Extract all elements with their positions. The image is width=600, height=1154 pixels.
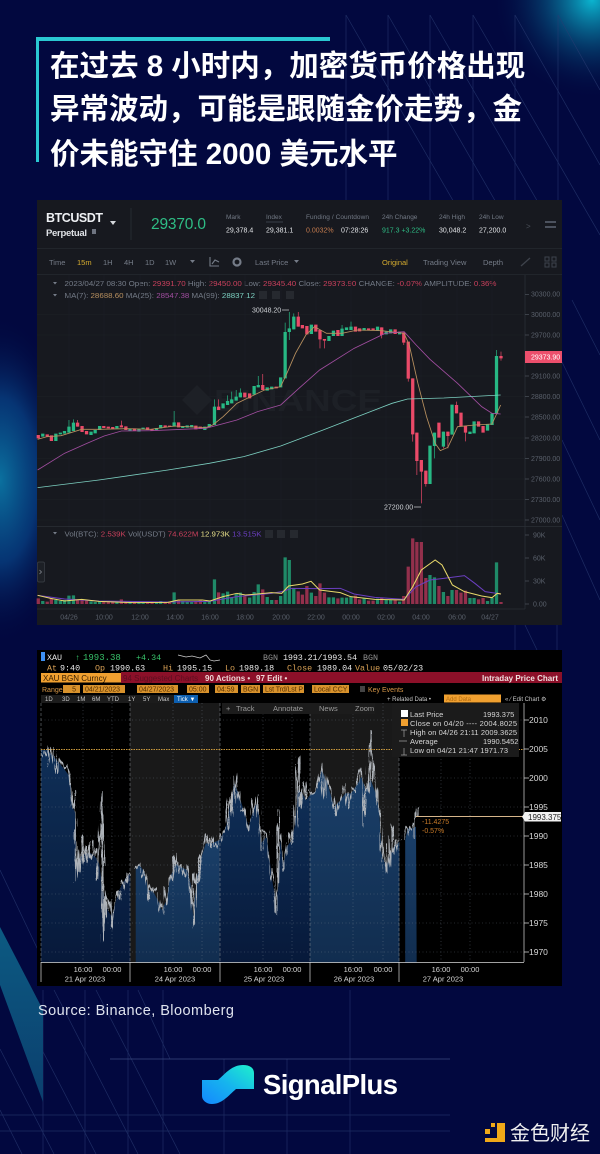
current price tag bbox=[525, 351, 562, 363]
header: symbol and market stats: 24h Low bbox=[479, 214, 504, 221]
title accent bracket bbox=[36, 37, 330, 162]
time axis: 25 Apr 2023 bbox=[244, 974, 284, 984]
header: symbol and market stats: > bbox=[526, 222, 531, 231]
panel: Binance BTCUSDT chart bbox=[37, 200, 562, 625]
title text: 价未能守住 2000 美元水平 bbox=[50, 138, 398, 171]
price axis: 27900.00 bbox=[531, 456, 560, 463]
time axis: 27 Apr 2023 bbox=[423, 974, 463, 984]
chart toolbar: 1H bbox=[103, 258, 113, 267]
quote rows: At bbox=[47, 664, 57, 674]
period tabs: « ⁄ Edit Chart ⚙ bbox=[505, 696, 546, 703]
header: symbol and market stats: Mark bbox=[226, 214, 241, 221]
high / low price markers: 30048.20 bbox=[252, 308, 281, 314]
price axis: 28200.00 bbox=[531, 436, 560, 442]
range row: 04:59 bbox=[217, 686, 235, 694]
price axis: 1990 bbox=[529, 831, 548, 841]
price axis: 27000.00 bbox=[531, 518, 560, 524]
header: symbol and market stats: 27,200.0 bbox=[479, 228, 506, 234]
command bar: XAU BGN Curncy bbox=[43, 674, 107, 683]
header: symbol and market stats: 917.3 +3.22% bbox=[382, 228, 425, 234]
price axis: 27600.00 bbox=[531, 476, 560, 484]
header: symbol and market stats: 29,381.1 bbox=[266, 228, 293, 234]
volume readout: Vol(BTC): 2.539K Vol(USDT) 74.622M 12.973K 13.515K bbox=[64, 532, 262, 538]
period tabs bbox=[41, 694, 546, 703]
time axis: 04:00 bbox=[412, 614, 430, 622]
range row: Range bbox=[42, 687, 63, 694]
time axis: 22:00 bbox=[307, 614, 325, 622]
price axis: 1993.375 bbox=[528, 813, 562, 822]
volume readout bbox=[53, 530, 298, 538]
period tabs: Max bbox=[158, 697, 169, 703]
quote rows: 1995.15 bbox=[177, 664, 212, 674]
legend: Last Price bbox=[410, 710, 443, 719]
legend: Low on 04/21 21:47 1971.73 bbox=[410, 746, 508, 755]
legend: 1990.5452 bbox=[483, 737, 518, 746]
quote rows: BGN bbox=[363, 653, 378, 663]
command bar: 90 Actions • bbox=[205, 674, 250, 683]
time axis: 06:00 bbox=[448, 614, 466, 622]
last price line and change: -0.57% bbox=[422, 828, 444, 835]
header: symbol and market stats bbox=[46, 208, 556, 240]
watermark: BINANCE bbox=[214, 383, 382, 418]
price axis bbox=[41, 703, 562, 962]
close on 04/20 reference line bbox=[41, 748, 524, 750]
period tabs: 6M bbox=[92, 697, 100, 703]
plot grid bbox=[41, 703, 524, 962]
time axis: 16:00 bbox=[201, 614, 219, 622]
range row: 04/21/2023 bbox=[85, 686, 120, 694]
period tabs: YTD bbox=[107, 697, 120, 703]
chart toolbar: Original bbox=[382, 258, 408, 267]
price axis: 30000.00 bbox=[531, 312, 560, 319]
candlestick chart with moving averages bbox=[38, 312, 501, 503]
chart toolbar: Zoom bbox=[355, 704, 374, 713]
logo: SignalPlus bbox=[202, 1065, 398, 1104]
price axis: 1995 bbox=[529, 802, 548, 812]
legend: High on 04/26 21:11 2009.3625 bbox=[410, 728, 517, 737]
icon: Jinse mark bbox=[485, 1123, 505, 1142]
period tabs: 1D bbox=[45, 697, 53, 703]
price axis: 1985 bbox=[529, 860, 548, 870]
time axis: 00:00 bbox=[283, 965, 301, 974]
header: symbol and market stats: Index bbox=[266, 214, 283, 221]
time axis: 16:00 bbox=[74, 965, 92, 974]
header: symbol and market stats: 29370.0 bbox=[151, 216, 206, 233]
quote rows: 05/02/23 bbox=[383, 664, 423, 674]
period tabs: 1M bbox=[77, 697, 85, 703]
quote rows bbox=[41, 652, 423, 674]
price axis: 29700.00 bbox=[531, 332, 560, 340]
chart toolbar: Trading View bbox=[423, 258, 467, 267]
header: symbol and market stats: 0.0032% bbox=[306, 228, 334, 234]
title text bbox=[50, 50, 525, 171]
gold price area and line bbox=[41, 730, 417, 963]
quote rows: 1990.63 bbox=[110, 664, 145, 674]
high / low price markers: 27200.00 bbox=[384, 504, 413, 512]
time axis bbox=[60, 614, 499, 622]
chart grid bbox=[37, 275, 525, 609]
OHLC readout: MA(7): 28688.60 MA(25): 28547.38 MA(99): 28837.12 bbox=[64, 293, 255, 300]
header: symbol and market stats: Perpetual bbox=[46, 228, 87, 239]
command bar bbox=[41, 672, 562, 683]
quote rows: ↑ bbox=[75, 653, 80, 663]
price axis: 2005 bbox=[529, 744, 548, 754]
time axis: 16:00 bbox=[432, 965, 450, 974]
time axis: 18:00 bbox=[236, 614, 254, 622]
time axis: 26 Apr 2023 bbox=[334, 974, 374, 984]
time axis: 04/26 bbox=[60, 614, 78, 622]
time axis: 21 Apr 2023 bbox=[65, 974, 105, 984]
OHLC readout: 2023/04/27 08:30 Open: 29391.70 High: 29450.00 Low: 29345.40 Close: 29373.90 CHANGE: -0.07% AMPLITUDE: 0.36% bbox=[64, 281, 496, 288]
chart toolbar: Time bbox=[49, 258, 65, 267]
time axis: 12:00 bbox=[131, 614, 149, 622]
command bar: 97 Edit • bbox=[256, 674, 287, 683]
price axis: 1980 bbox=[529, 889, 548, 899]
chart toolbar: News bbox=[319, 704, 338, 713]
plot background bands bbox=[130, 703, 399, 963]
header: symbol and market stats: 29,378.4 bbox=[226, 228, 253, 234]
range row: 05:00 bbox=[189, 686, 207, 694]
time axis: 04/27 bbox=[481, 614, 499, 622]
header: symbol and market stats: 24h Change bbox=[382, 214, 418, 221]
period tabs: 5Y bbox=[143, 697, 150, 703]
range row: BGN bbox=[243, 686, 258, 694]
time axis: 00:00 bbox=[342, 614, 360, 622]
time axis: 24 Apr 2023 bbox=[155, 974, 195, 984]
time axis: 14:00 bbox=[166, 614, 184, 622]
quote rows: 1993.21/1993.54 bbox=[283, 653, 357, 663]
volume bars bbox=[38, 538, 501, 604]
chart toolbar: Track bbox=[236, 704, 255, 713]
range row: Key Events bbox=[368, 687, 404, 694]
period tabs: Add Data bbox=[446, 697, 472, 703]
chart toolbar: Depth bbox=[483, 258, 503, 267]
range row: 04/27/2023 bbox=[139, 686, 174, 694]
header: symbol and market stats: Funding / Countdown bbox=[306, 214, 369, 221]
quote rows: 9:40 bbox=[60, 664, 80, 674]
panel: Bloomberg XAU chart bbox=[37, 650, 562, 986]
last price line and change bbox=[416, 816, 524, 835]
quote rows: 1989.04 bbox=[317, 664, 352, 674]
header: symbol and market stats: 07:28:26 bbox=[341, 228, 368, 234]
volume axis: 90K bbox=[533, 532, 546, 540]
chart toolbar: 15m bbox=[77, 258, 92, 267]
time axis bbox=[41, 962, 479, 984]
quote rows: Hi bbox=[163, 664, 173, 674]
legend: Close on 04/20 ---- 2004.8025 bbox=[410, 719, 517, 728]
time axis: 16:00 bbox=[164, 965, 182, 974]
header: symbol and market stats: BTCUSDT bbox=[46, 211, 103, 225]
range row: Lst Trd/Lst P bbox=[265, 686, 303, 694]
price axis: 28800.00 bbox=[531, 394, 560, 401]
chart toolbar bbox=[49, 257, 556, 267]
high / low price markers bbox=[252, 308, 421, 512]
time axis: 10:00 bbox=[95, 614, 113, 622]
period tabs: + Related Data • bbox=[387, 697, 431, 703]
chart toolbar: 4H bbox=[124, 258, 134, 267]
command bar: Intraday Price Chart bbox=[482, 674, 558, 683]
quote rows: Value bbox=[355, 664, 380, 674]
chart toolbar bbox=[222, 703, 375, 714]
legend: 1993.375 bbox=[483, 710, 514, 719]
time axis: 00:00 bbox=[374, 965, 392, 974]
last price line and change: -11.4275 bbox=[422, 819, 449, 826]
logo: Jinse Finance watermark bbox=[485, 1122, 590, 1145]
price axis: 1970 bbox=[529, 947, 548, 957]
price axis: 30300.00 bbox=[531, 292, 560, 298]
price axis: 2000 bbox=[529, 773, 548, 783]
wordmark: SignalPlus bbox=[263, 1069, 398, 1100]
collapse tab bbox=[38, 562, 44, 582]
quote rows: Close bbox=[287, 664, 312, 674]
range row bbox=[42, 685, 404, 694]
quote rows: Lo bbox=[225, 664, 235, 674]
header: symbol and market stats: 30,048.2 bbox=[439, 228, 466, 234]
period tabs: 1Y bbox=[128, 697, 135, 703]
command bar: 94 Suggested Charts bbox=[123, 674, 198, 683]
volume axis: 0.00 bbox=[533, 602, 547, 608]
price axis: 2010 bbox=[529, 715, 548, 725]
period tabs: 3D bbox=[62, 697, 70, 703]
time axis: 00:00 bbox=[103, 965, 121, 974]
quote rows: +4.34 bbox=[136, 653, 161, 663]
title text: 在过去 8 小时内，加密货币价格出现 bbox=[50, 50, 525, 83]
quote rows: BGN bbox=[263, 653, 278, 663]
source note: Source: Binance, Bloomberg bbox=[38, 1003, 234, 1019]
Jinse wordmark: 金色财经 bbox=[510, 1122, 590, 1145]
time axis: 16:00 bbox=[254, 965, 272, 974]
time axis: 00:00 bbox=[461, 965, 479, 974]
price axis: 28500.00 bbox=[531, 414, 560, 422]
range row: 5 bbox=[72, 686, 76, 694]
time axis: 02:00 bbox=[377, 614, 395, 622]
volume axis: 60K bbox=[533, 556, 546, 562]
price axis bbox=[525, 292, 560, 604]
legend bbox=[392, 703, 519, 757]
price axis: 29100.00 bbox=[531, 374, 560, 380]
price axis: 1975 bbox=[529, 918, 548, 928]
quote rows: Op bbox=[95, 664, 105, 674]
quote rows: 1989.18 bbox=[239, 664, 274, 674]
icon: SignalPlus mark bbox=[202, 1065, 254, 1104]
legend: Average bbox=[410, 737, 438, 746]
chart toolbar: 1W bbox=[165, 258, 177, 267]
time axis: 16:00 bbox=[344, 965, 362, 974]
title bbox=[36, 37, 525, 171]
current price tag: 29373.90 bbox=[531, 354, 560, 362]
OHLC readout bbox=[53, 281, 496, 300]
chart toolbar: Annotate bbox=[273, 704, 303, 713]
quote rows: 1993.38 bbox=[83, 653, 121, 663]
volume axis bbox=[533, 532, 547, 608]
time axis: 00:00 bbox=[193, 965, 211, 974]
volume axis: 30K bbox=[533, 578, 546, 586]
range row: Local CCY bbox=[314, 686, 348, 694]
chart toolbar: Last Price bbox=[255, 258, 288, 267]
header: symbol and market stats: 24h High bbox=[439, 214, 465, 221]
title text: 异常波动，可能是跟随金价走势，金 bbox=[50, 93, 523, 126]
period tabs: Tick ▼ bbox=[177, 697, 195, 703]
quote rows: XAU bbox=[47, 653, 62, 663]
time axis: 20:00 bbox=[272, 614, 290, 622]
chart toolbar: + bbox=[226, 704, 231, 713]
price axis: 27300.00 bbox=[531, 497, 560, 504]
chart toolbar: 1D bbox=[145, 258, 155, 267]
